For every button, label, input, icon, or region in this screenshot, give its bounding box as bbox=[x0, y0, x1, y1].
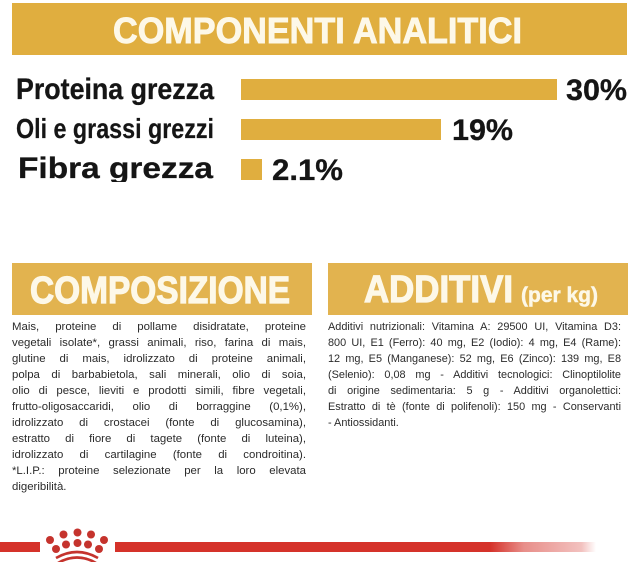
text block: additivi: Estratto di tè (fonte di polifenoli): 150 mg - Conservanti bbox=[328, 401, 621, 413]
row: oli e grassi grezzi: Oli e grassi grezzi bbox=[16, 113, 214, 144]
text block: additivi: 800 UI, E1 (Ferro): 40 mg, E2 (Iodio): 4 mg, E4 (Rame): bbox=[328, 337, 621, 349]
text block: composizione bbox=[12, 320, 306, 493]
chart: analytical components bbox=[12, 3, 627, 187]
row: oli e grassi grezzi bbox=[16, 113, 513, 147]
text block: composizione: *L.I.P.: proteine selezionate per la loro elevata bbox=[12, 465, 306, 477]
text block: composizione: vegetali isolate*, grassi animali, riso, farina di mais, bbox=[12, 337, 306, 349]
text block: composizione: glutine di mais, idrolizzato di proteine animali, bbox=[12, 353, 306, 365]
text block: composizione: estratto di fiore di tagete (fonte di luteina), bbox=[12, 433, 306, 445]
red line right bbox=[115, 542, 596, 552]
text block: composizione: idrolizzato di crostacei (fonte di glucosamina), bbox=[12, 417, 306, 429]
icon: crown bbox=[46, 528, 108, 562]
row: fibra grezza: Fibra grezza bbox=[18, 152, 213, 185]
panel: additivi heading: (per kg) bbox=[521, 284, 598, 307]
text block: additivi: - Antiossidanti. bbox=[328, 417, 399, 429]
text block: additivi: 12 mg, E5 (Manganese): 52 mg, E6 (Zinco): 139 mg, E8 bbox=[328, 353, 621, 365]
text block: composizione: olio di pesce, lieviti e prodotti simili, fibre vegetali, bbox=[12, 385, 306, 397]
header band: componenti analitici bbox=[12, 3, 627, 55]
row: fibra grezza bbox=[0, 152, 343, 190]
text block: composizione: frutto-oligosaccaridi, olio di borraggine (0,1%), bbox=[12, 401, 306, 413]
red line left bbox=[0, 542, 40, 552]
header band: componenti analitici: COMPONENTI ANALITICI bbox=[113, 10, 522, 51]
text block: additivi: di origine sedimentaria: 5 g - Additivi organolettici: bbox=[328, 385, 621, 397]
text block: composizione: idrolizzato di cartilagine (fonte di condroitina). bbox=[12, 449, 306, 461]
text block: composizione: Mais, proteine di pollame disidratate, proteine bbox=[12, 320, 306, 332]
text block: additivi bbox=[328, 320, 621, 429]
panel: composizione heading: COMPOSIZIONE bbox=[30, 270, 290, 312]
text block: additivi: Additivi nutrizionali: Vitamina A: 29500 UI, Vitamina D3: bbox=[328, 320, 621, 332]
row: oli e grassi grezzi: 19% bbox=[452, 114, 513, 147]
panel: additivi heading bbox=[328, 263, 628, 315]
row: fibra grezza: 2.1% bbox=[272, 154, 343, 187]
row: proteina grezza: Proteina grezza bbox=[16, 73, 214, 106]
text block: composizione: polpa di barbabietola, sali minerali, olio di soia, bbox=[12, 369, 306, 381]
panel: additivi heading: ADDITIVI bbox=[364, 269, 513, 311]
text block: additivi: (Selenio): 0,08 mg - Additivi tecnologici: Clinoptilolite bbox=[328, 369, 621, 381]
text block: composizione: digeribilità. bbox=[12, 481, 66, 493]
row: proteina grezza bbox=[16, 73, 627, 107]
row: proteina grezza: 30% bbox=[566, 74, 627, 107]
